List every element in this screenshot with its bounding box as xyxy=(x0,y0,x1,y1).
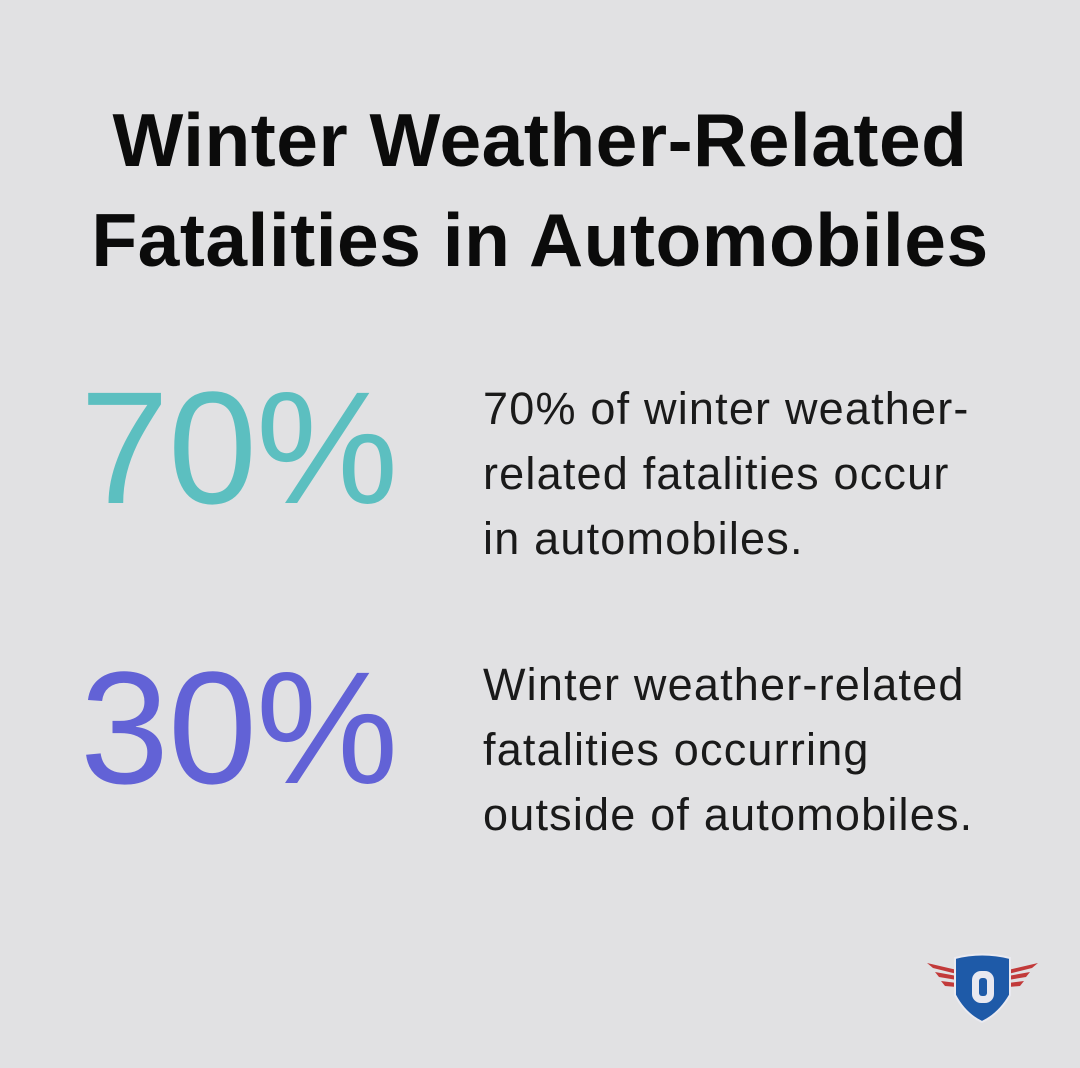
stat 30% description xyxy=(483,659,973,840)
title: Fatalities in Automobiles xyxy=(91,198,989,282)
stat 30% description: Winter weather-related xyxy=(483,659,965,710)
stat 30% description: outside of automobiles. xyxy=(483,789,973,840)
stat 30% number: 30% xyxy=(80,638,397,817)
stat 70% description: related fatalities occur xyxy=(483,448,950,499)
stat 70% description: 70% of winter weather- xyxy=(483,383,970,434)
stat 70% description: in automobiles. xyxy=(483,513,804,564)
title xyxy=(91,98,989,282)
stat 30% description: fatalities occurring xyxy=(483,724,870,775)
stat 70% number: 70% xyxy=(80,358,397,537)
stat 70% description xyxy=(483,383,970,564)
title: Winter Weather-Related xyxy=(113,98,967,182)
icon: logo shield with wings xyxy=(927,954,1038,1023)
